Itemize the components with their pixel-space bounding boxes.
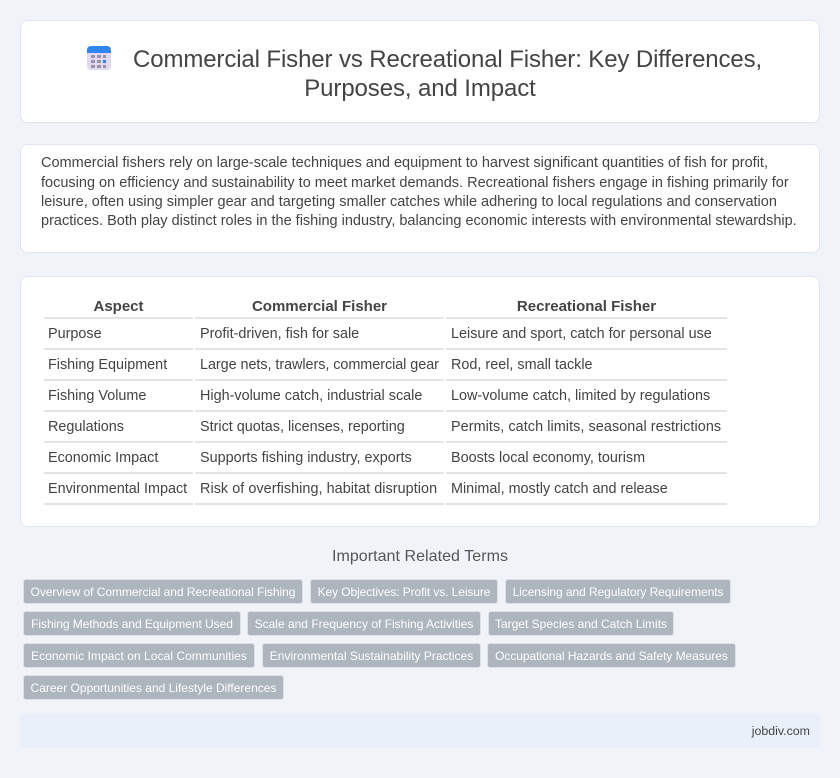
title: Purposes, and Impact (304, 75, 536, 102)
related terms tags (23, 579, 736, 700)
comparison table: Purpose (48, 326, 102, 342)
panel: comparison table (20, 276, 820, 527)
comparison table: Strict quotas, licenses, reporting (200, 419, 405, 435)
table header: Recreational Fisher (517, 298, 656, 315)
comparison table: Environmental Impact (48, 481, 187, 497)
summary text: focusing on efficiency and sustainability to meet market demands. Recreational fishers engage in fishing primarily for (41, 175, 789, 191)
related terms tags: Career Opportunities and Lifestyle Differences (31, 681, 276, 695)
summary text: leisure, often using simpler gear and targeting smaller catches while adhering to local regulations and conservation (41, 194, 777, 210)
title (133, 46, 762, 102)
comparison table (44, 298, 727, 505)
footer site name: jobdiv.com (752, 724, 810, 738)
table header: Aspect (93, 298, 144, 315)
comparison table: Leisure and sport, catch for personal use (451, 326, 712, 342)
comparison table: Supports fishing industry, exports (200, 450, 412, 466)
table header: Commercial Fisher (252, 298, 387, 315)
comparison table: Fishing Equipment (48, 357, 167, 373)
comparison table: Risk of overfishing, habitat disruption (200, 481, 437, 497)
comparison table: Fishing Volume (48, 388, 146, 404)
footer (20, 714, 820, 748)
related terms tags: Environmental Sustainability Practices (270, 649, 473, 663)
comparison table: Rod, reel, small tackle (451, 357, 593, 373)
table header (93, 298, 656, 315)
related terms tags: Economic Impact on Local Communities (31, 649, 247, 663)
summary text: Commercial fishers rely on large-scale techniques and equipment to harvest significant quantities of fish for profit, (41, 155, 768, 171)
comparison table: Minimal, mostly catch and release (451, 481, 668, 497)
comparison table: Low-volume catch, limited by regulations (451, 388, 710, 404)
related terms tags: Overview of Commercial and Recreational Fishing (31, 585, 295, 599)
comparison table: High-volume catch, industrial scale (200, 388, 422, 404)
comparison table: Large nets, trawlers, commercial gear (200, 357, 439, 373)
related terms tags: Scale and Frequency of Fishing Activities (255, 617, 473, 631)
title: Commercial Fisher vs Recreational Fisher: Key Differences, (133, 46, 762, 73)
related terms tags: Key Objectives: Profit vs. Leisure (318, 585, 490, 599)
comparison table: Permits, catch limits, seasonal restrictions (451, 419, 721, 435)
icon: calendar (87, 46, 111, 70)
heading: related terms: Important Related Terms (332, 548, 508, 565)
panel: summary (20, 144, 820, 253)
related terms tags: Licensing and Regulatory Requirements (513, 585, 723, 599)
comparison table: Regulations (48, 419, 124, 435)
comparison table: Boosts local economy, tourism (451, 450, 645, 466)
summary text: practices. Both play distinct roles in the fishing industry, balancing economic interests with environmental stewardship. (41, 213, 797, 229)
panel: title header (20, 20, 820, 123)
comparison table: Profit-driven, fish for sale (200, 326, 359, 342)
related terms tags: Occupational Hazards and Safety Measures (495, 649, 728, 663)
summary text (41, 155, 797, 229)
related terms tags: Target Species and Catch Limits (495, 617, 667, 631)
comparison table: Economic Impact (48, 450, 158, 466)
related terms tags: Fishing Methods and Equipment Used (31, 617, 233, 631)
